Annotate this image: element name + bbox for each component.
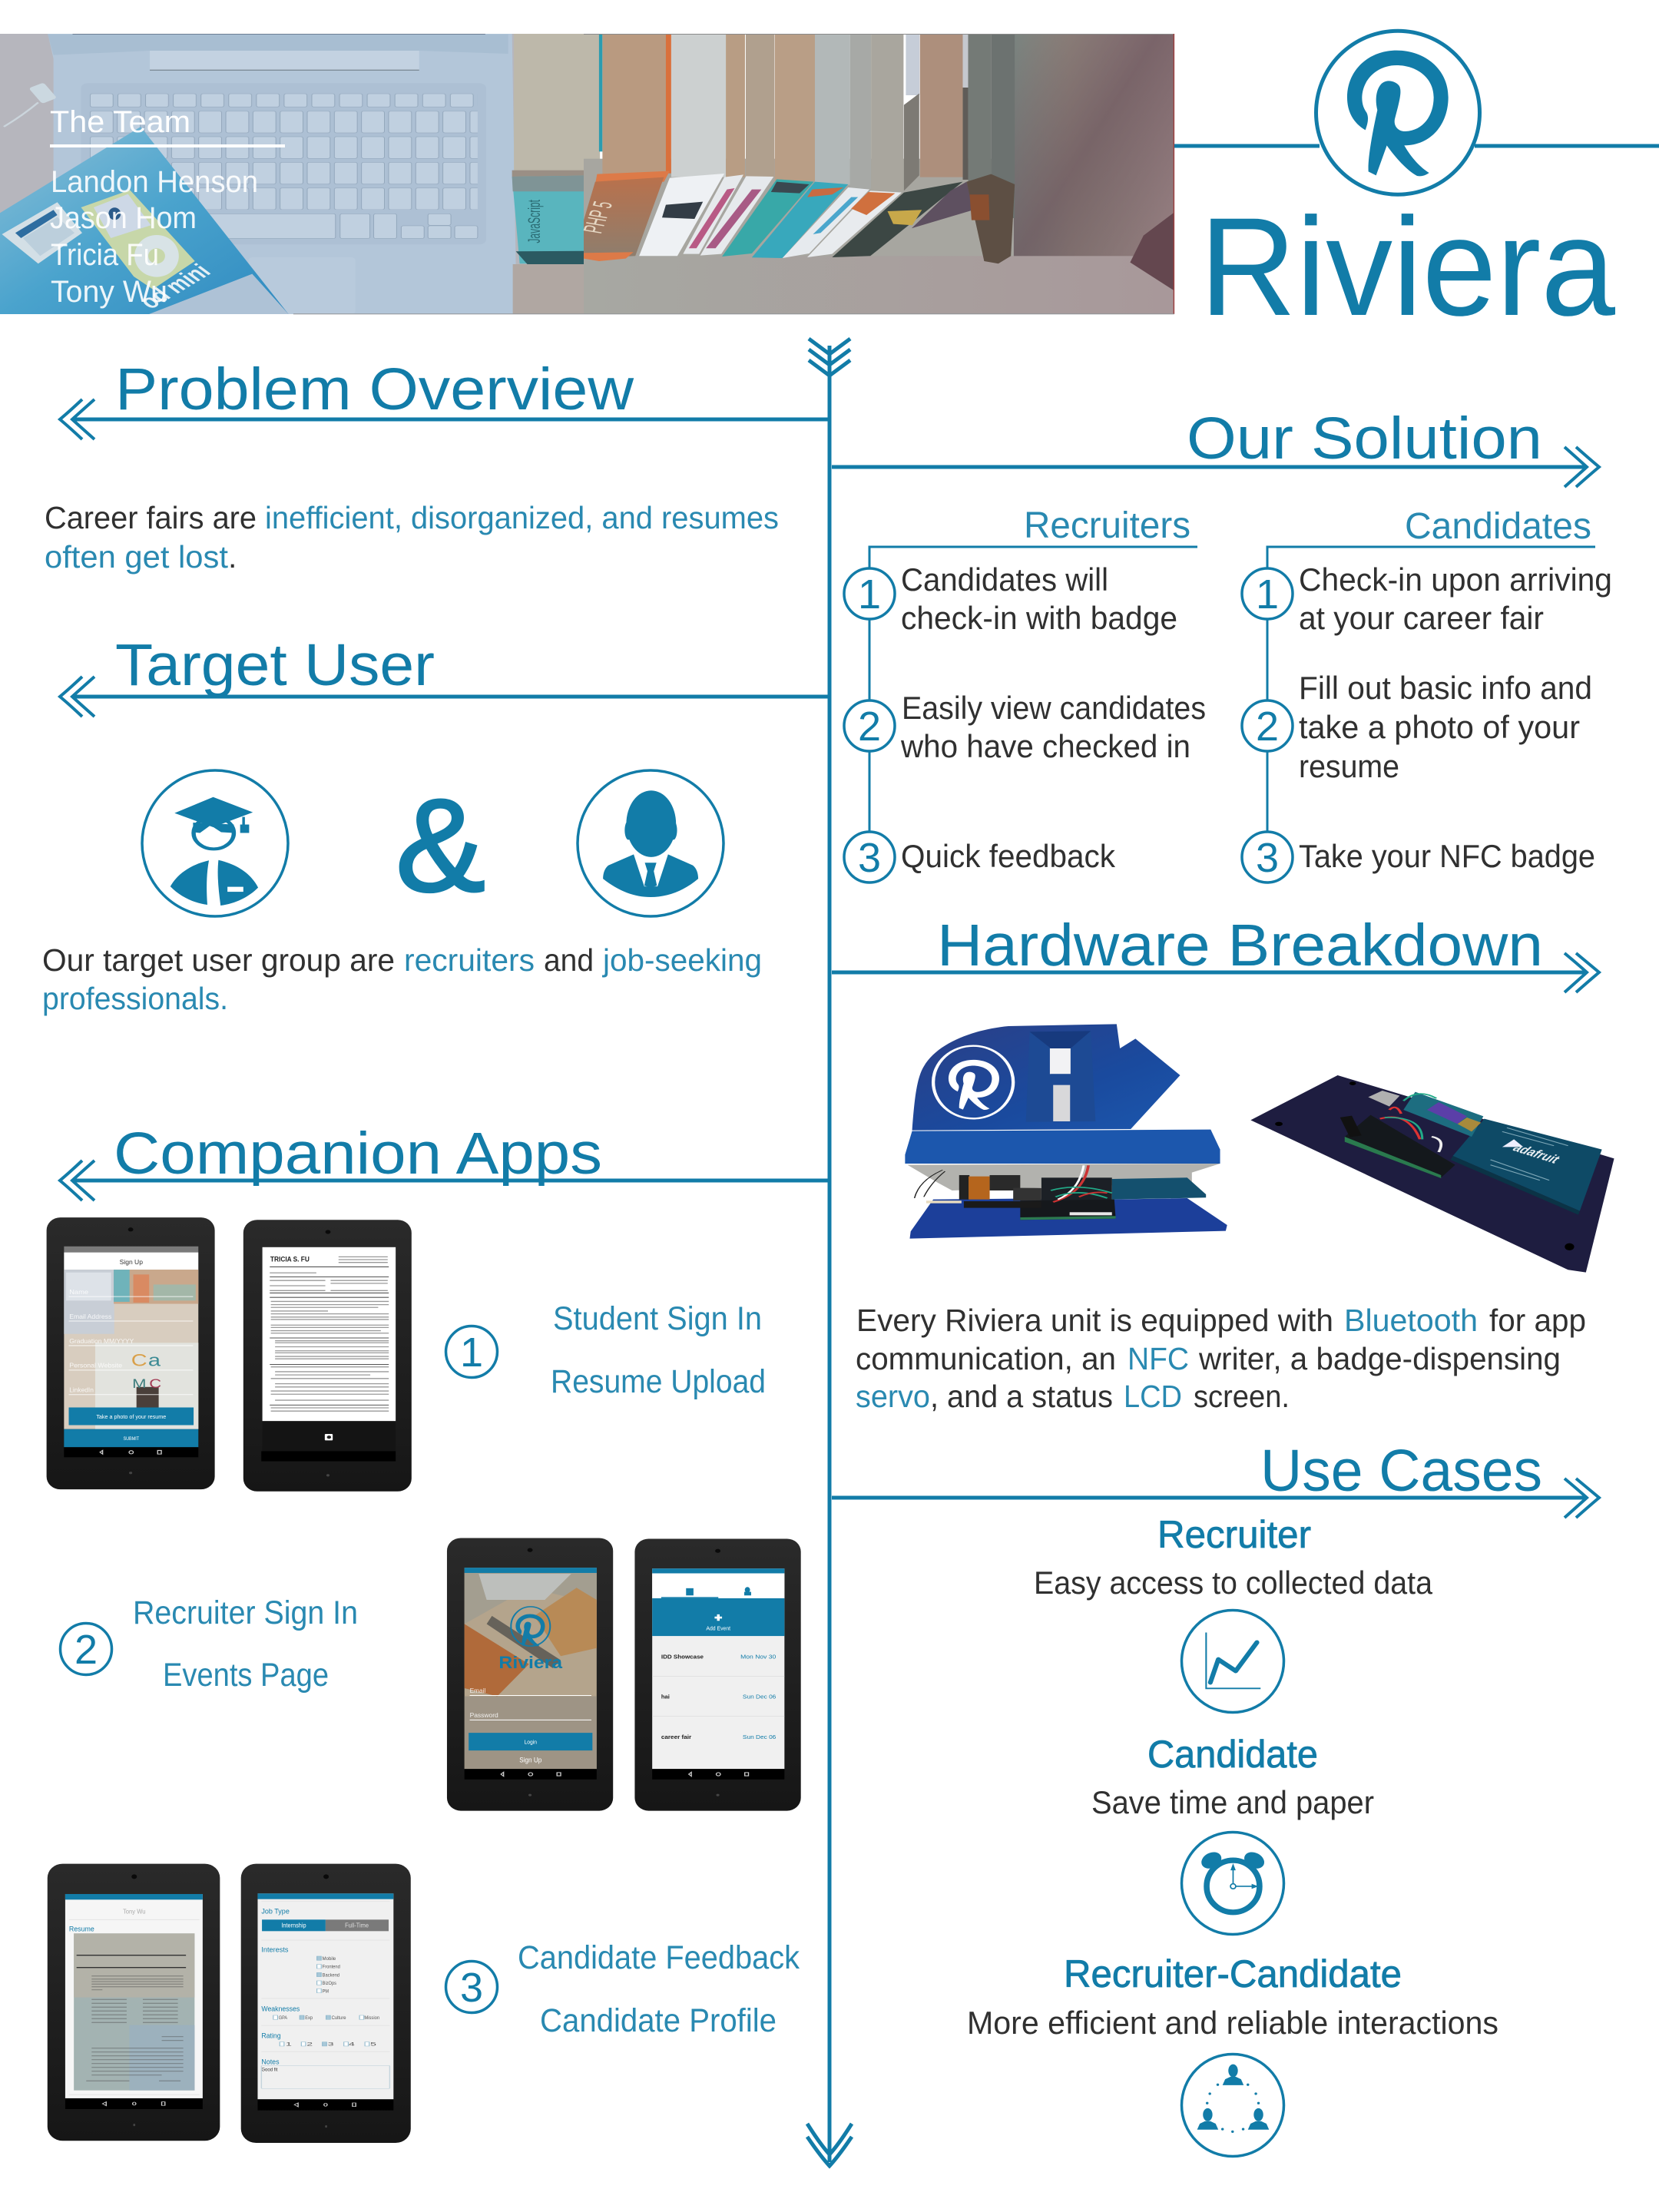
use case: Recruiter-Candidate: Recruiter-Candidate <box>1064 1952 1402 1995</box>
text block: team members: Landon Henson <box>51 165 258 199</box>
text block: problem statement: . <box>228 539 237 575</box>
panel: student sign-up tablet: M <box>132 1376 147 1391</box>
numbered label: student apps: Resume Upload <box>551 1363 766 1400</box>
text block: team members: Jason Hom <box>50 201 197 235</box>
panel: candidate feedback tablet: Mission <box>364 2015 379 2021</box>
text block: hardware description: screen. <box>1194 1379 1290 1414</box>
numbered label: student apps <box>445 1300 766 1400</box>
panel: candidate feedback tablet <box>241 1864 411 2143</box>
icon: line chart <box>1206 1632 1260 1688</box>
panel: recruiter events tablet: Sun Dec 06 <box>743 1734 777 1740</box>
text block: hardware description: writer, a badge-dispensing <box>1198 1341 1561 1376</box>
numbered label: candidate apps <box>445 1939 800 2039</box>
panel: candidate feedback tablet: Backend <box>323 1972 339 1978</box>
panel: team photo banner <box>0 34 1174 314</box>
panel: candidate feedback tablet: Exp <box>305 2015 313 2021</box>
panel: student sign-up tablet: a <box>148 1352 161 1370</box>
panel: recruiters steps: 1 <box>858 571 881 618</box>
text block: hardware description: LCD <box>1124 1379 1182 1414</box>
icon: business person <box>578 770 724 916</box>
panel: resume upload tablet: TRICIA S. FU <box>270 1256 310 1263</box>
panel: candidate feedback tablet: 4 <box>349 2041 355 2047</box>
panel: recruiters steps: 3 <box>858 835 881 881</box>
text block: target user description: Our target user group are <box>42 942 395 978</box>
heading: Hardware Breakdown <box>832 912 1599 992</box>
heading: Problem Overview: Problem Overview <box>115 356 634 422</box>
text block: target user description: job-seeking <box>602 942 762 978</box>
photo: laptop and booklet: od mini <box>133 260 217 313</box>
panel: student sign-up tablet: C <box>149 1376 161 1391</box>
use case: Candidate: Candidate <box>1147 1733 1318 1776</box>
panel: recruiter login tablet: Riviera <box>498 1654 563 1672</box>
panel: recruiters steps <box>844 505 1206 882</box>
panel: student sign-up tablet: Take a photo of your resume <box>96 1413 166 1420</box>
panel: recruiter events tablet: Mon Nov 30 <box>740 1654 777 1660</box>
panel: candidate feedback tablet: Interests <box>261 1946 289 1954</box>
panel: candidates steps: Take your NFC badge <box>1299 838 1595 874</box>
panel: recruiter login tablet: Password <box>470 1712 498 1720</box>
panel: candidate feedback tablet: Rating <box>261 2032 281 2040</box>
photo: laptop and booklet: JavaScript <box>525 199 544 243</box>
panel: candidates steps: 3 <box>1256 835 1279 881</box>
icon: alarm clock <box>1198 1849 1267 1912</box>
panel: recruiter login tablet: Email <box>470 1687 485 1694</box>
panel: recruiters steps: Candidates will <box>901 561 1108 598</box>
panel: student sign-up tablet: SUBMIT <box>123 1435 140 1442</box>
text block: team members: Tony Wu <box>51 275 167 309</box>
panel: candidate feedback tablet: Culture <box>332 2015 346 2021</box>
panel: candidate profile tablet: Tony Wu <box>123 1908 145 1915</box>
heading: The Team: The Team <box>50 105 190 139</box>
heading: Our Solution <box>832 406 1599 487</box>
text block: hardware description: servo <box>856 1379 930 1414</box>
heading: Our Solution: Our Solution <box>1187 406 1542 472</box>
text block: hardware description: Bluetooth <box>1344 1303 1478 1338</box>
photo: book row: PHP 5 <box>578 200 618 235</box>
text block: target user description: and <box>544 942 594 978</box>
photo: laptop and booklet <box>0 34 600 314</box>
use case: Recruiter-Candidate: More efficient and reliable interactions <box>967 2005 1498 2041</box>
heading: Companion Apps: Companion Apps <box>114 1121 602 1187</box>
numbered label: student apps: 1 <box>460 1330 483 1376</box>
panel: student sign-up tablet: Personal Website <box>69 1363 122 1369</box>
text block: hardware description: NFC <box>1128 1341 1189 1376</box>
panel: candidate feedback tablet: Weaknesses <box>261 2005 300 2013</box>
panel: student sign-up tablet: LinkedIn <box>69 1387 94 1393</box>
panel: candidate feedback tablet: Mobile <box>323 1956 336 1962</box>
panel: candidate feedback tablet: Full-Time <box>345 1922 369 1929</box>
image: NFC circuit board <box>1250 1075 1614 1273</box>
heading: Target User <box>60 632 830 717</box>
icon: student <box>142 770 288 916</box>
panel: candidates steps: resume <box>1299 748 1399 784</box>
panel: candidate profile tablet: Resume <box>69 1926 94 1933</box>
text block: hardware description: , and a status <box>930 1379 1113 1414</box>
panel: recruiter login tablet: Login <box>525 1739 537 1745</box>
text block: target user description: professionals. <box>42 981 228 1016</box>
panel: recruiter events tablet: Add Event <box>706 1625 731 1631</box>
numbered label: recruiter apps <box>60 1594 358 1694</box>
numbered label: candidate apps: Candidate Feedback <box>518 1939 800 1976</box>
use case: Candidate: Save time and paper <box>1091 1784 1374 1820</box>
panel: recruiters steps: 2 <box>858 704 881 750</box>
panel: candidates steps: Fill out basic info and <box>1299 670 1592 706</box>
heading: Use Cases <box>832 1438 1599 1518</box>
text block: hardware description: for app <box>1489 1303 1586 1338</box>
panel: recruiter events tablet: hai <box>661 1694 670 1700</box>
text block: problem statement: Career fairs are <box>45 500 257 535</box>
panel: student sign-up tablet: Sign Up <box>120 1259 143 1266</box>
use case: Recruiter-Candidate <box>967 1952 1498 2157</box>
panel: candidate feedback tablet: GPA <box>279 2015 287 2021</box>
text block: problem statement: often get lost <box>45 539 229 575</box>
numbered label: recruiter apps: 2 <box>75 1627 98 1673</box>
heading: Companion Apps <box>60 1121 830 1200</box>
panel: candidate feedback tablet: 3 <box>328 2041 333 2047</box>
panel: candidates steps <box>1242 506 1612 882</box>
panel: resume upload tablet <box>243 1220 412 1492</box>
panel: candidate feedback tablet: 5 <box>370 2041 376 2047</box>
arrow: central timeline <box>807 339 852 2166</box>
panel: candidates steps: Check-in upon arriving <box>1299 561 1612 598</box>
image: blue badge dispenser <box>905 1024 1227 1239</box>
use case: Recruiter: Easy access to collected data <box>1034 1565 1433 1601</box>
heading: Target User: Target User <box>115 632 435 698</box>
text block: hardware description <box>856 1303 1586 1414</box>
numbered label: candidate apps: 3 <box>460 1965 483 2011</box>
text block: hardware description: communication, an <box>856 1341 1116 1376</box>
panel: recruiter events tablet <box>634 1539 801 1811</box>
panel: recruiters steps: Easily view candidates <box>902 690 1206 726</box>
text block: team members <box>50 165 258 309</box>
panel: recruiter login tablet: Sign Up <box>519 1757 541 1764</box>
panel: candidate feedback tablet: BizOps <box>323 1981 336 1986</box>
panel: recruiter events tablet: IDD Showcase <box>661 1654 704 1660</box>
icon: connected people <box>1197 2065 1269 2133</box>
panel: recruiters steps: who have checked in <box>900 728 1190 764</box>
panel: recruiter events tablet: Sun Dec 06 <box>743 1694 777 1700</box>
title: Riviera: Riviera <box>1200 188 1616 345</box>
panel: recruiter events tablet: career fair <box>661 1734 692 1740</box>
panel: candidates steps: take a photo of your <box>1299 709 1580 745</box>
panel: student sign-up tablet: Graduation MM/YYYY <box>69 1338 134 1345</box>
panel: recruiters steps: check-in with badge <box>901 600 1177 636</box>
text block: problem statement <box>45 500 779 575</box>
panel: recruiter login tablet <box>447 1538 613 1811</box>
logo: Riviera mark with rule <box>1174 31 1659 194</box>
numbered label: recruiter apps: Recruiter Sign In <box>133 1594 358 1631</box>
panel: student sign-up tablet <box>47 1217 215 1489</box>
panel: candidate feedback tablet: 2 <box>306 2041 313 2047</box>
panel: candidates steps: at your career fair <box>1299 600 1544 636</box>
panel: student sign-up tablet: C <box>131 1352 147 1370</box>
heading: Hardware Breakdown: Hardware Breakdown <box>937 912 1543 979</box>
panel: recruiters steps: Recruiters <box>1024 505 1190 546</box>
panel: candidate feedback tablet: Notes <box>261 2058 280 2066</box>
panel: candidate feedback tablet: PM <box>323 1988 329 1994</box>
numbered label: recruiter apps: Events Page <box>163 1657 329 1694</box>
panel: candidate feedback tablet: Good fit <box>261 2067 277 2072</box>
text block: team members: Tricia Fu <box>51 238 159 272</box>
image: NFC circuit board: adafruit <box>1509 1141 1564 1166</box>
text block: hardware description: Every Riviera unit is equipped with <box>856 1303 1333 1338</box>
panel: candidate feedback tablet: Internship <box>281 1922 306 1929</box>
numbered label: student apps: Student Sign In <box>553 1300 762 1337</box>
heading: Problem Overview <box>60 356 830 439</box>
panel: candidates steps: Candidates <box>1405 506 1591 547</box>
text block: target user description: recruiters <box>404 942 535 978</box>
panel: student sign-up tablet: Email Address <box>69 1313 112 1320</box>
panel: candidate feedback tablet: 1 <box>286 2041 292 2047</box>
panel: candidates steps: 1 <box>1256 571 1279 618</box>
panel: candidate feedback tablet: Frontend <box>323 1964 340 1969</box>
photo: book row <box>293 34 1174 314</box>
heading: The Team <box>50 105 285 147</box>
use case: Recruiter: Recruiter <box>1157 1513 1311 1556</box>
text block: target user description <box>42 942 762 1016</box>
use case: Recruiter <box>1034 1513 1433 1713</box>
panel: candidate profile tablet <box>48 1864 220 2141</box>
panel: student sign-up tablet: Name <box>69 1289 88 1296</box>
panel: candidate feedback tablet: Job Type <box>261 1907 290 1916</box>
text block: problem statement: inefficient, disorganized, and resumes <box>265 500 779 535</box>
panel: candidates steps: 2 <box>1256 704 1279 750</box>
panel: recruiters steps: Quick feedback <box>901 838 1116 874</box>
numbered label: candidate apps: Candidate Profile <box>540 2002 777 2039</box>
icon: ampersand: & <box>396 772 485 919</box>
heading: Use Cases: Use Cases <box>1260 1438 1542 1504</box>
use case: Candidate <box>1091 1733 1374 1934</box>
